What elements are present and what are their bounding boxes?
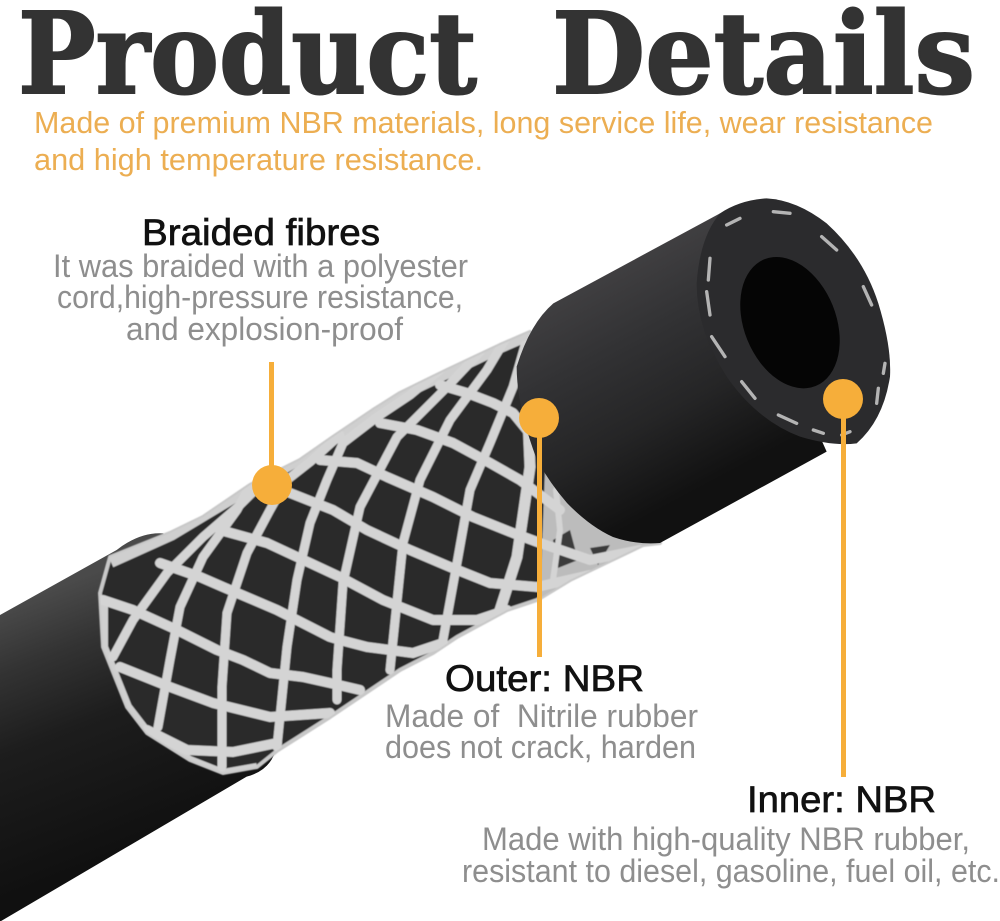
label: inner NBR: Made with high-quality NBR rubber,	[482, 821, 970, 857]
hose bore	[722, 242, 858, 403]
label: inner NBR: Inner: NBR	[747, 779, 936, 820]
callout marker: braided fibres	[252, 362, 292, 505]
callout marker: inner NBR	[823, 379, 863, 777]
label: braided fibres: and explosion-proof	[126, 311, 403, 347]
light fibre haze on the upper edge and far end	[103, 332, 530, 773]
hose end face	[697, 198, 890, 444]
label: outer NBR	[385, 658, 698, 765]
label: outer NBR: does not crack, harden	[385, 729, 696, 765]
hose illustration	[0, 198, 890, 921]
intro text: Made of premium NBR materials, long service life, wear resistance	[34, 105, 933, 140]
intro text	[34, 105, 933, 177]
title	[18, 0, 975, 120]
braid hoops	[103, 385, 640, 752]
label: braided fibres: Braided fibres	[142, 212, 380, 253]
reinforcement stitches	[707, 212, 885, 435]
intro text: and high temperature resistance.	[34, 142, 483, 177]
callout marker: outer NBR	[519, 398, 559, 657]
label: outer NBR: Outer: NBR	[445, 658, 644, 699]
braided fibre section	[100, 332, 660, 773]
left rubber tube	[0, 533, 277, 921]
label: braided fibres: cord,high-pressure resistance,	[57, 279, 463, 315]
label: inner NBR	[462, 779, 1000, 889]
label: braided fibres	[53, 212, 468, 347]
label: outer NBR: Made of Nitrile rubber	[385, 698, 698, 734]
braid arcs	[113, 340, 560, 767]
label: braided fibres: It was braided with a polyester	[53, 248, 468, 284]
front rubber tube	[517, 213, 827, 543]
